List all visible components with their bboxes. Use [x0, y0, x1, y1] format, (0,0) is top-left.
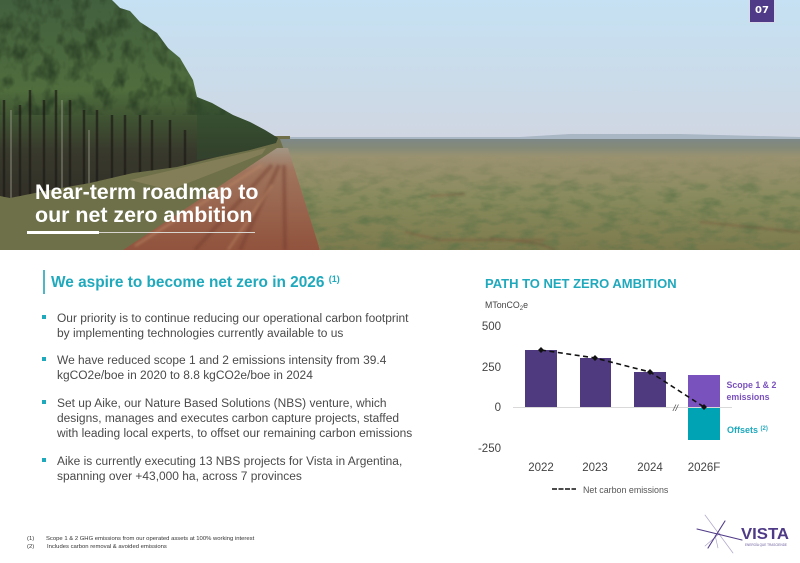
bullet 4: Aike is currently executing 13 NBS projects for Vista in Argentina, [57, 454, 402, 468]
x axis labels: 2026F [688, 462, 720, 474]
y axis labels: 500 [482, 321, 501, 333]
scope label: Scope 1 & 2 [726, 380, 776, 390]
unit label: 2 [520, 306, 524, 312]
bullet 2 [42, 353, 386, 382]
logo: Vista [696, 514, 789, 554]
axis break mark: // [672, 403, 680, 413]
bar chart [478, 300, 776, 495]
bullet 4: spanning over +43,000 ha, across 7 provinces [57, 469, 302, 483]
footnotes: Scope 1 & 2 GHG emissions from our operated assets at 100% working interest [46, 536, 254, 542]
footnotes [27, 536, 254, 550]
bullet 2: kgCO2e/boe in 2020 to 8.8 kgCO2e/boe in 2024 [57, 368, 313, 382]
bullet 2: We have reduced scope 1 and 2 emissions intensity from 39.4 [57, 353, 386, 367]
bullet 4 [42, 454, 402, 483]
bars [525, 350, 720, 440]
bullet list [42, 311, 412, 483]
left panel heading [43, 270, 363, 294]
x axis labels: 2024 [637, 462, 663, 474]
bullet 3: Set up Aike, our Nature Based Solutions (NBS) venture, which [57, 396, 387, 410]
title underline [27, 231, 255, 234]
bullet 3: designs, manages and executes carbon capture projects, staffed [57, 411, 399, 425]
scope label: emissions [726, 392, 770, 402]
footnotes: Includes carbon removal & avoided emissions [47, 544, 167, 550]
chart heading: PATH TO NET ZERO AMBITION [485, 276, 677, 291]
title [35, 180, 258, 227]
offsets label: (2) [761, 426, 768, 432]
hero photo: plantation, dirt road and field [0, 0, 800, 250]
x axis labels: 2023 [582, 462, 608, 474]
y axis labels: 0 [495, 402, 501, 414]
bullet 1: Our priority is to continue reducing our operational carbon footprint [57, 311, 408, 325]
logo star [697, 515, 742, 553]
page number badge: 07 [755, 5, 769, 16]
footnotes: (2) [27, 544, 34, 550]
bullet 1 [42, 311, 408, 340]
offsets label: Offsets [727, 425, 758, 435]
zero line [513, 406, 732, 408]
title: Near-term roadmap to [35, 180, 258, 204]
x axis labels [528, 462, 720, 474]
x axis labels: 2022 [528, 462, 554, 474]
legend: Net carbon emissions [583, 485, 669, 495]
unit label: e [523, 300, 528, 310]
bullet 1: by implementing technologies currently available to us [57, 326, 343, 340]
y axis labels [478, 321, 501, 455]
net emissions dashed line [538, 347, 707, 410]
y axis labels: -250 [478, 443, 501, 455]
page number badge [749, 0, 775, 23]
bullet 3 [42, 396, 412, 440]
left panel heading: We aspire to become net zero in 2026 (1) [51, 274, 340, 291]
bullet 3: with leading local experts, to offset our remaining carbon emissions [57, 426, 412, 440]
title: our net zero ambition [35, 203, 252, 227]
unit label: MTonCO [485, 300, 520, 310]
logo wordmark: VISTA [741, 526, 789, 543]
y axis labels: 250 [482, 362, 501, 374]
footnotes: (1) [27, 536, 34, 542]
